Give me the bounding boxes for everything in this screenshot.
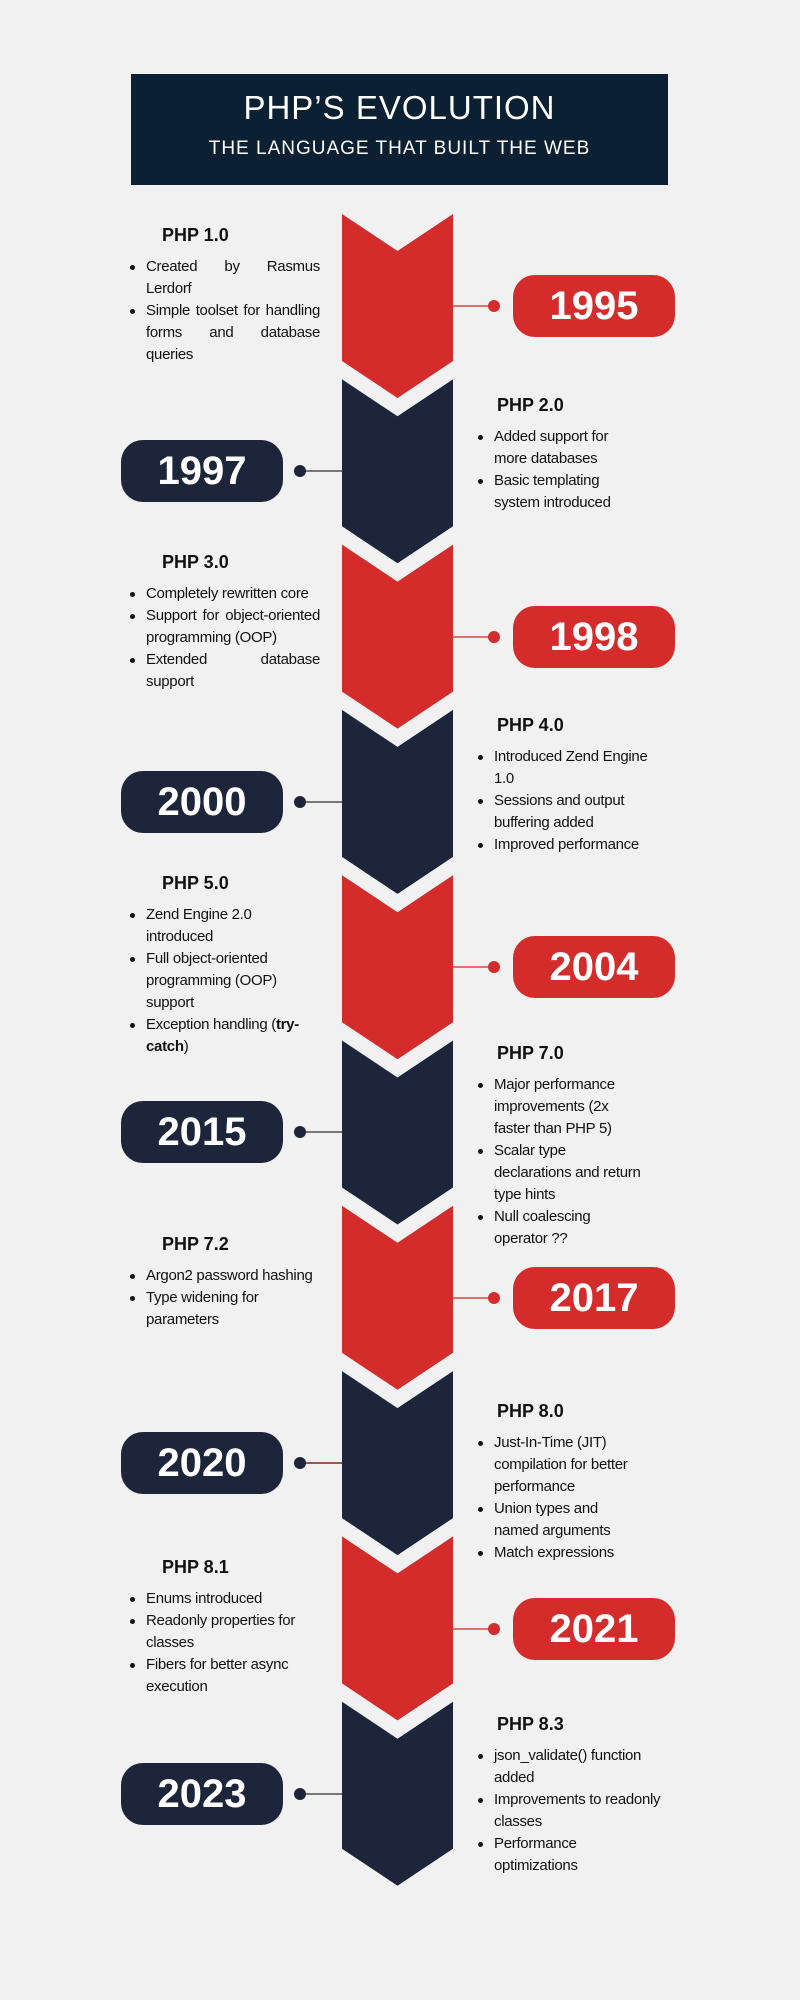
text: PHP 4.0: Improved performance (494, 836, 639, 853)
title header (131, 74, 668, 185)
text: PHP 8.3 (478, 1714, 660, 1874)
year 2021 (513, 1598, 675, 1660)
text: PHP 7.2: Type widening for parameters (146, 1289, 258, 1328)
text: PHP 2.0: PHP 2.0 (497, 395, 564, 415)
text: PHP 8.0: PHP 8.0 (497, 1401, 564, 1421)
connector 2023 (294, 1788, 342, 1800)
text: PHP 7.2: Argon2 password hashing (146, 1267, 313, 1284)
year 2023 (121, 1763, 283, 1825)
text: PHP 8.0 (478, 1401, 628, 1561)
year 1997 (121, 440, 283, 502)
year 2000 (121, 771, 283, 833)
text: PHP 7.0: Scalar type declarations and return type hints (494, 1142, 641, 1203)
text: PHP 8.3: Improvements to readonly classes (494, 1791, 660, 1830)
year 1995 (513, 275, 675, 337)
connector 2017 (453, 1292, 500, 1304)
connector 2020 (294, 1457, 342, 1469)
year 2020 (121, 1432, 283, 1494)
text: PHP 2.0: Basic templating system introduced (494, 472, 611, 511)
text: PHP 3.0: Completely rewritten core (146, 585, 309, 602)
text: PHP 7.0: PHP 7.0 (497, 1043, 564, 1063)
text: PHP 8.0: Union types and named arguments (494, 1500, 610, 1539)
text: PHP 5.0 (130, 873, 299, 1055)
year 1998: 1998 (550, 615, 638, 659)
year 1995: 1995 (550, 284, 638, 328)
connector 2015 (294, 1126, 342, 1138)
year 2021: 2021 (550, 1607, 638, 1651)
text: PHP 1.0: Simple toolset for handling forms and database queries (146, 302, 320, 363)
connector 1995 (453, 300, 500, 312)
text: PHP 2.0 (478, 395, 611, 511)
year 2015 (121, 1101, 283, 1163)
connector 2000 (294, 796, 342, 808)
connector 1997 (294, 465, 342, 477)
year 2015: 2015 (158, 1110, 246, 1154)
connector 1998 (453, 631, 500, 643)
text: PHP 7.0 (478, 1043, 641, 1247)
text: PHP 8.1: Fibers for better async execution (146, 1656, 288, 1695)
year 2000: 2000 (158, 780, 246, 824)
year 1997: 1997 (158, 449, 246, 493)
text: PHP 8.3: Performance optimizations (494, 1835, 578, 1874)
year 2017 (513, 1267, 675, 1329)
title header: PHP’S EVOLUTION (243, 89, 556, 126)
text: PHP 8.1: Readonly properties for classes (146, 1612, 295, 1651)
text: PHP 1.0: Created by Rasmus Lerdorf (146, 258, 320, 297)
year 1998 (513, 606, 675, 668)
text: PHP 3.0: Extended database support (146, 651, 320, 690)
text: PHP 8.3: json_validate() function added (494, 1747, 641, 1786)
chevron timeline (342, 214, 453, 1886)
connector 2021 (453, 1623, 500, 1635)
text: PHP 1.0 (130, 225, 320, 363)
text: PHP 8.1: PHP 8.1 (162, 1557, 229, 1577)
text: PHP 2.0: Added support for more databases (494, 428, 608, 467)
text: PHP 4.0: PHP 4.0 (497, 715, 564, 735)
text: PHP 1.0: PHP 1.0 (162, 225, 229, 245)
text: PHP 7.0: Major performance improvements (2x faster than PHP 5) (494, 1076, 615, 1137)
year 2004: 2004 (550, 945, 638, 989)
text: PHP 8.3: PHP 8.3 (497, 1714, 564, 1734)
text: PHP 7.2 (130, 1234, 313, 1328)
text: PHP 3.0 (130, 552, 320, 690)
year 2004 (513, 936, 675, 998)
text: PHP 4.0: Sessions and output buffering added (494, 792, 624, 831)
text: PHP 8.0: Match expressions (494, 1544, 614, 1561)
text: PHP 4.0 (478, 715, 648, 853)
text: PHP 8.1: Enums introduced (146, 1590, 262, 1607)
title header: THE LANGUAGE THAT BUILT THE WEB (209, 138, 590, 159)
text: PHP 7.0: Null coalescing operator ?? (494, 1208, 590, 1247)
text: PHP 5.0: Zend Engine 2.0 introduced (146, 906, 252, 945)
year 2020: 2020 (158, 1441, 246, 1485)
text: PHP 3.0: Support for object-oriented programming (OOP) (146, 607, 320, 646)
text: PHP 5.0: Exception handling (try-catch) (146, 1016, 299, 1055)
year 2017: 2017 (550, 1276, 638, 1320)
text: PHP 7.2: PHP 7.2 (162, 1234, 229, 1254)
year 2023: 2023 (158, 1772, 246, 1816)
text: PHP 4.0: Introduced Zend Engine 1.0 (494, 748, 648, 787)
text: PHP 8.1 (130, 1557, 296, 1695)
text: PHP 3.0: PHP 3.0 (162, 552, 229, 572)
text: PHP 8.0: Just-In-Time (JIT) compilation for better performance (494, 1434, 627, 1495)
connector 2004 (453, 961, 500, 973)
text: PHP 5.0: PHP 5.0 (162, 873, 229, 893)
text: PHP 5.0: Full object-oriented programming (OOP) support (146, 950, 277, 1011)
